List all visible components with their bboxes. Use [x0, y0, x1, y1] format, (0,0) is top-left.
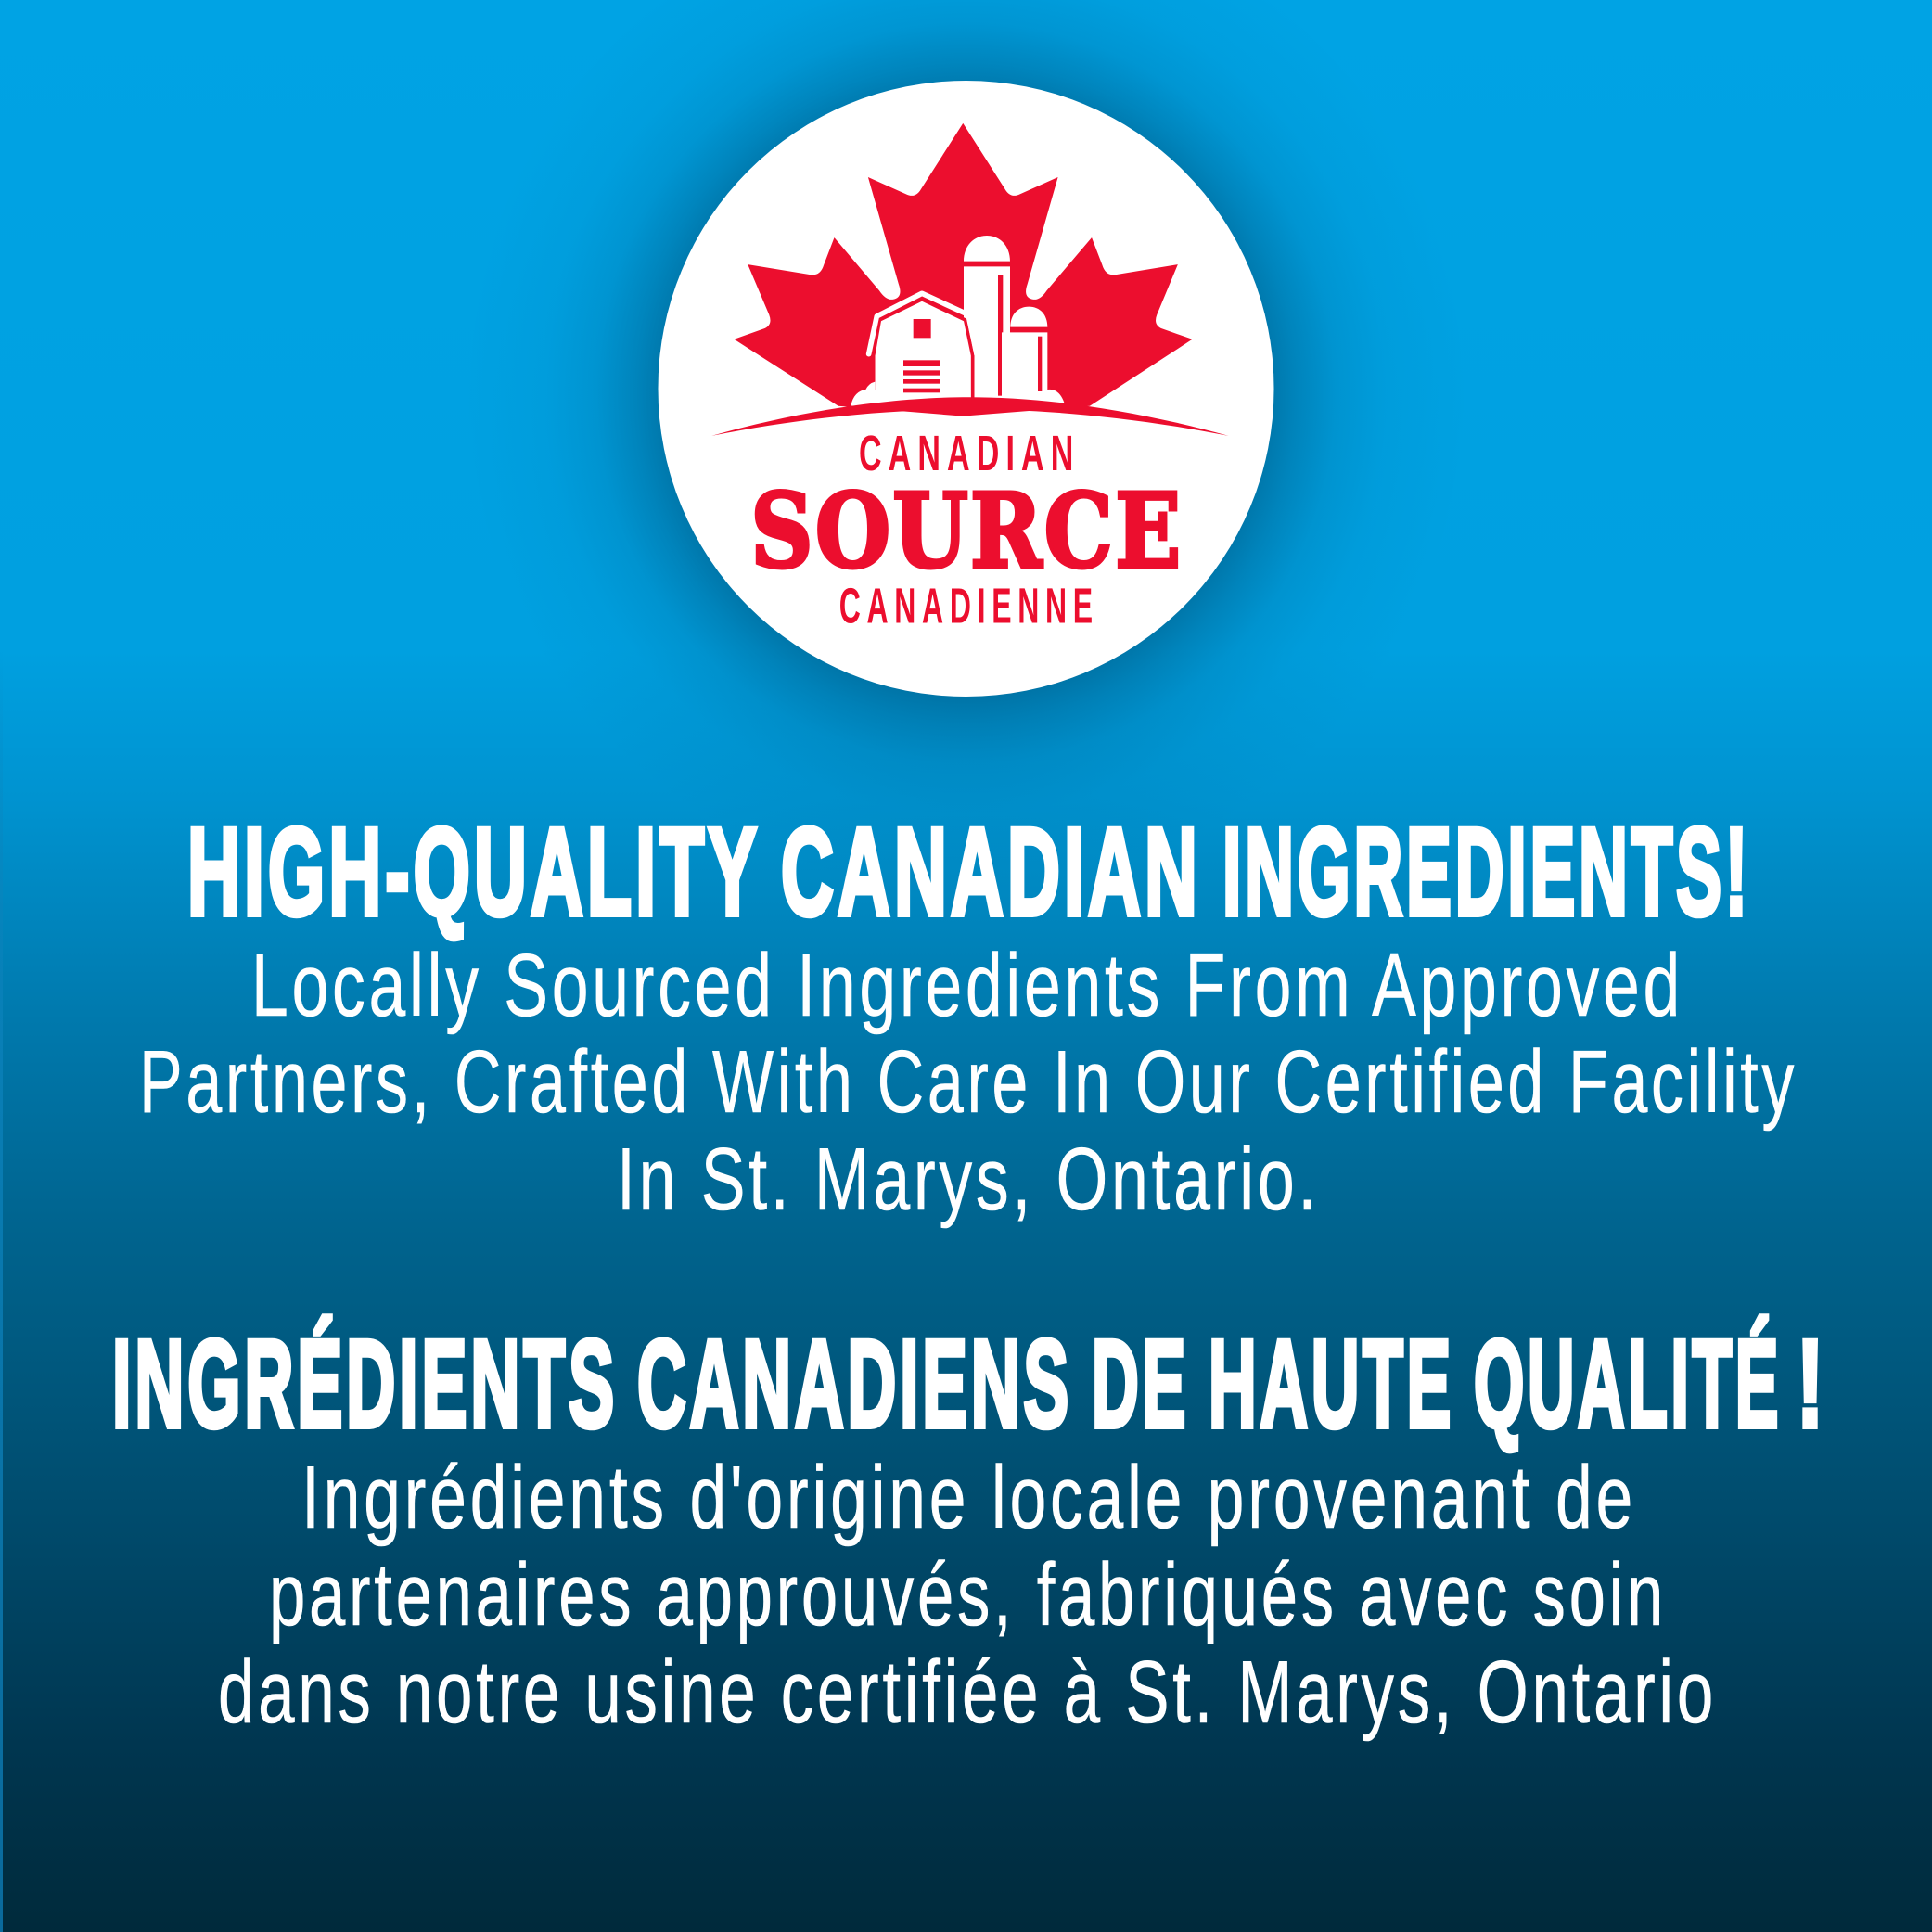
badge shadow: [466, 0, 1467, 894]
wordmark: SOURCE: SOURCE: [750, 471, 1183, 591]
heading: English: CANADIAN: [781, 803, 1201, 941]
icon: hill arc: [711, 397, 1228, 436]
heading: English: [187, 803, 1751, 941]
heading: French: !: [1797, 1315, 1828, 1453]
barn ground mound: [851, 382, 971, 408]
heading: French: CANADIENS: [637, 1315, 1072, 1453]
large silo: [964, 236, 1010, 402]
wordmark: CANADIENNE: CANADIENNE: [839, 579, 1099, 634]
heading: French: [112, 1315, 1828, 1453]
heading: English: HIGH-QUALITY: [187, 803, 761, 941]
barn roof: [869, 293, 977, 355]
wordmark: [750, 426, 1183, 634]
body text: French: [218, 1448, 1717, 1742]
heading: French: HAUTE: [1209, 1315, 1454, 1453]
badge circle: [659, 81, 1274, 697]
logo badge: Canadian Source: [466, 0, 1467, 894]
barn window: [914, 319, 931, 338]
wordmark: CANADIAN: CANADIAN: [859, 426, 1080, 481]
barn body: [874, 300, 973, 402]
icon: barn and silos: [851, 236, 1064, 408]
English section: [139, 803, 1798, 1229]
heading: French: INGRÉDIENTS: [112, 1315, 618, 1453]
French section: [112, 1315, 1828, 1742]
barn door slats: [903, 360, 940, 392]
heading: French: DE: [1092, 1315, 1189, 1453]
body text: English: [139, 936, 1798, 1229]
icon: maple leaf: [735, 123, 1192, 416]
small silo: [1002, 307, 1064, 405]
body text: English: In St. Marys, Ontario.: [617, 1130, 1320, 1229]
